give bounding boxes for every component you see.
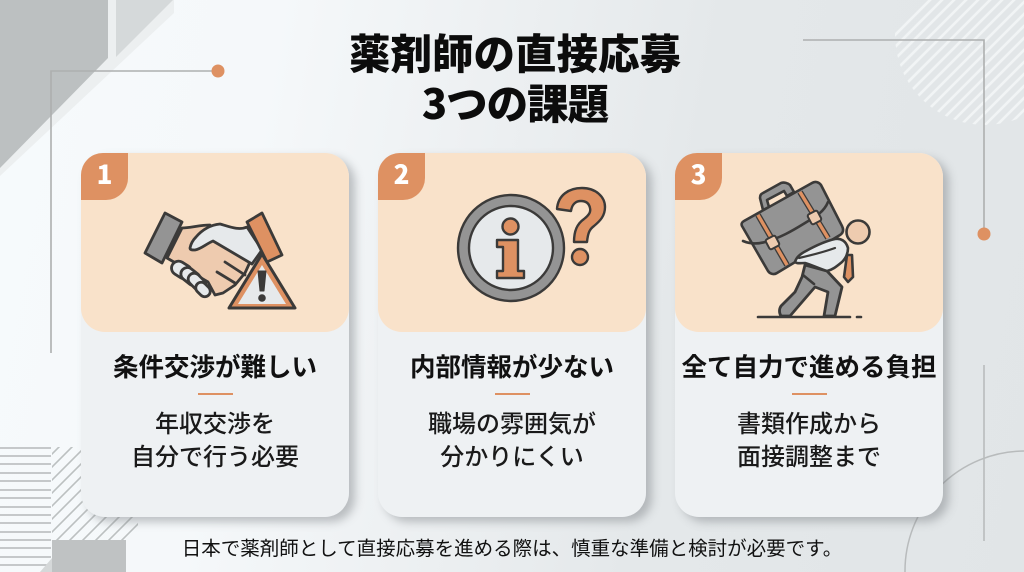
card 2 heading: 内部情報が少ない <box>410 354 614 382</box>
icon: info and question mark <box>456 186 606 302</box>
badge 3: 3 <box>691 155 706 192</box>
title: 薬剤師の直接応募 <box>349 21 681 81</box>
icon: handshake with warning <box>144 212 297 310</box>
badge 1: 1 <box>97 155 112 192</box>
badge 2 <box>378 153 425 200</box>
card 1 illustration background <box>81 153 349 332</box>
badge 1 <box>81 153 128 200</box>
card 3 text: 書類作成から <box>737 411 881 438</box>
badge 3 <box>675 153 722 200</box>
icon: person carrying briefcase <box>740 180 871 318</box>
panel: card 2 <box>378 153 646 517</box>
card 2 text: 分かりにくい <box>440 444 584 471</box>
card 2 text: 職場の雰囲気が <box>428 411 596 438</box>
card 2 text <box>428 411 596 471</box>
card 2 illustration background <box>378 153 646 332</box>
badge 2: 2 <box>394 155 409 192</box>
card 3 illustration background <box>675 153 943 332</box>
card 1 text <box>131 411 299 471</box>
card 1 text: 年収交渉を <box>155 411 275 438</box>
card 1 heading: 条件交渉が難しい <box>113 354 317 382</box>
card 3 text <box>737 411 881 471</box>
title <box>349 21 681 131</box>
footer text: 日本で薬剤師として直接応募を進める際は、慎重な準備と検討が必要です。 <box>182 538 842 560</box>
title: 3つの課題 <box>422 71 608 131</box>
card 3 text: 面接調整まで <box>737 444 881 471</box>
card 1 text: 自分で行う必要 <box>131 444 299 471</box>
panel: card 3 <box>675 153 943 517</box>
card 3 heading: 全て自力で進める負担 <box>681 354 936 382</box>
panel: card 1 <box>81 153 349 517</box>
